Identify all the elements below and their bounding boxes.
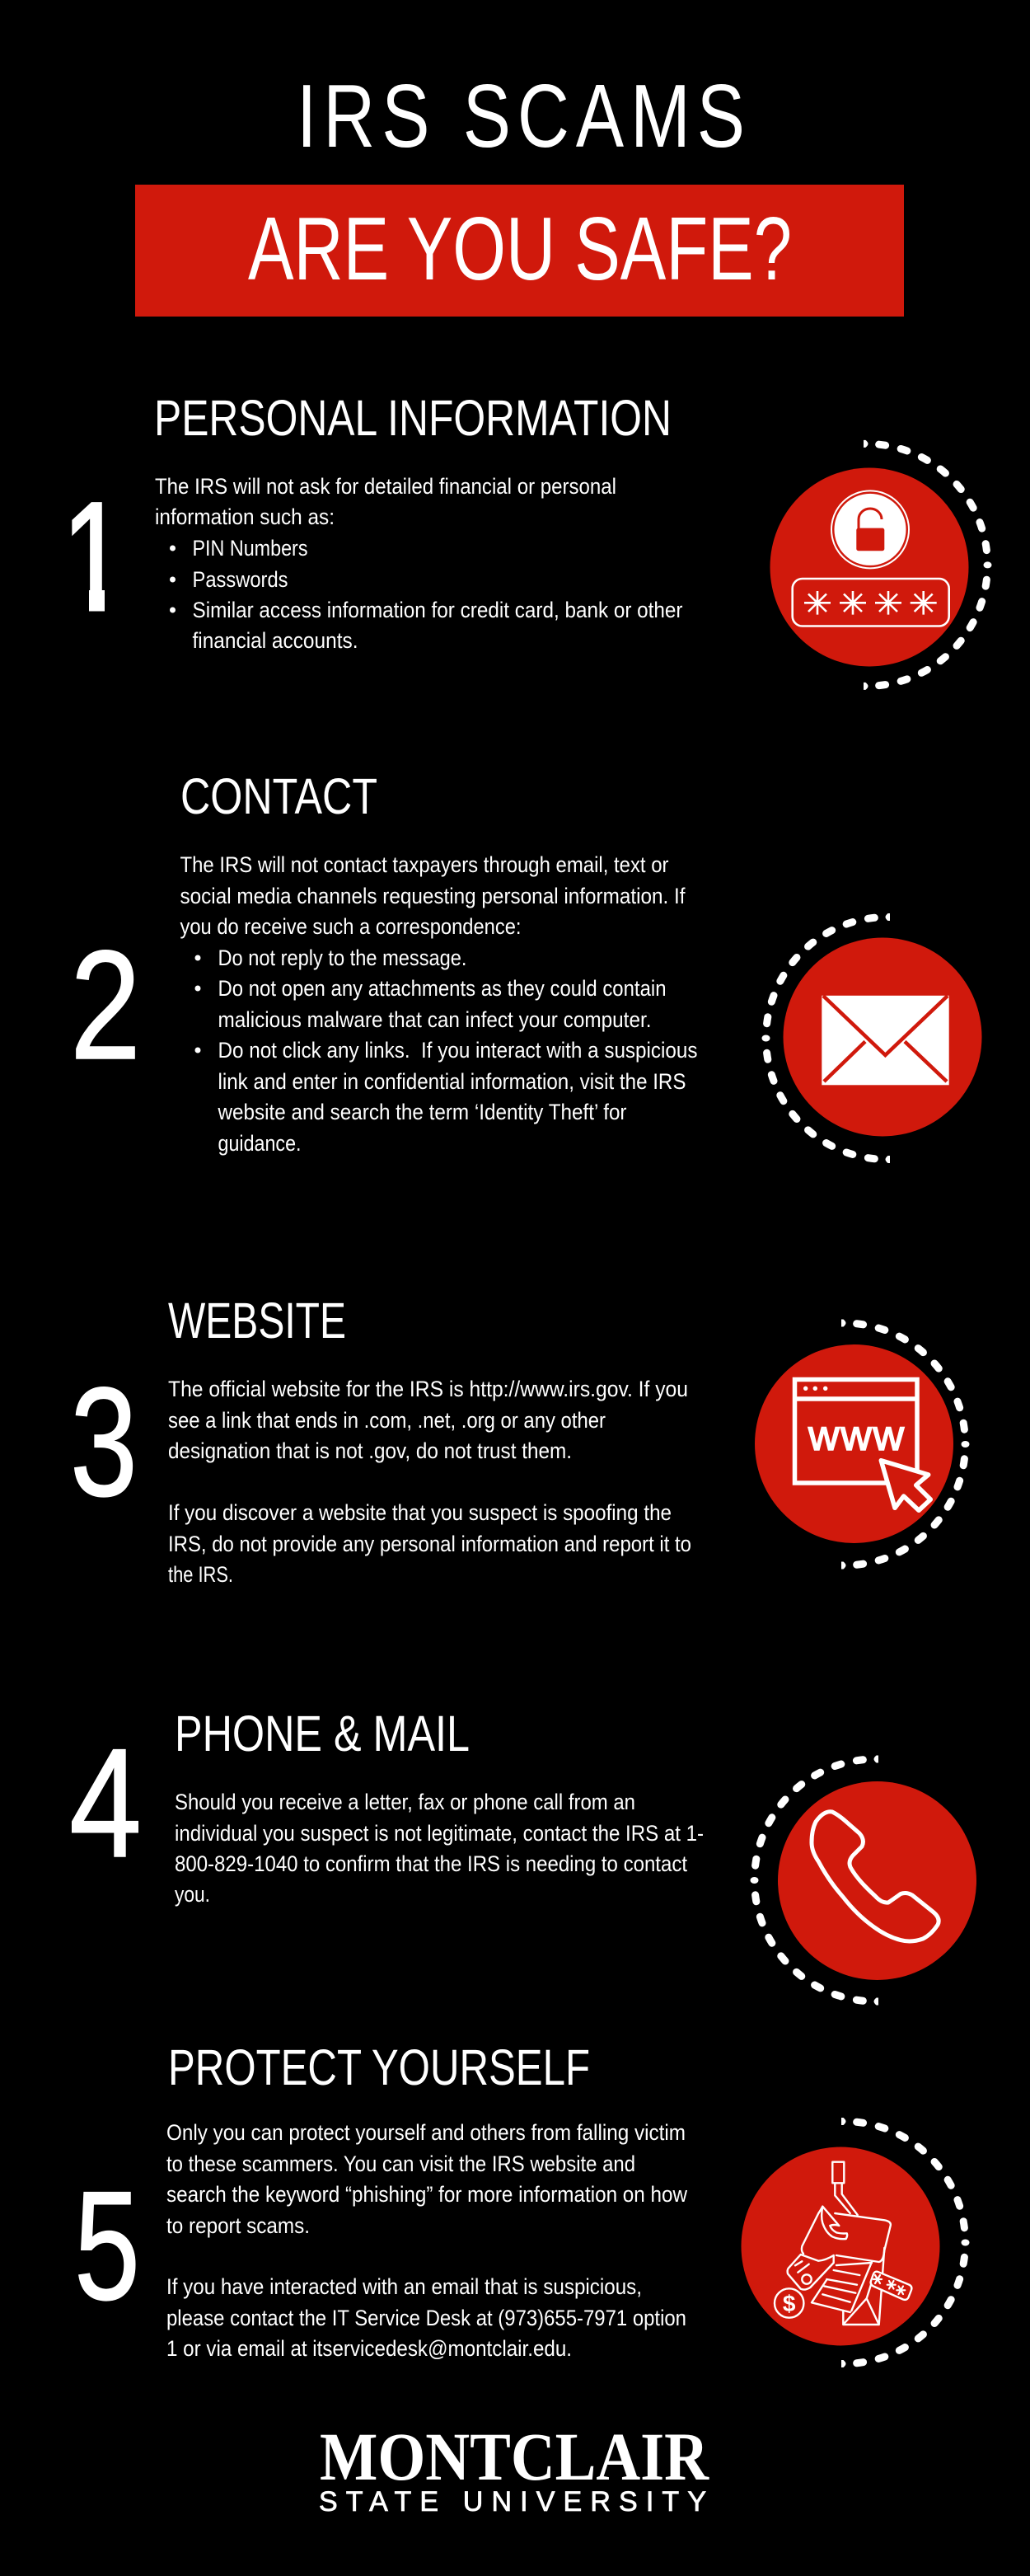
icon: envelope — [761, 913, 982, 1163]
text block: contact: Do not open any attachments as they could contain — [218, 976, 666, 1001]
text block: personal information: Passwords — [193, 567, 288, 592]
text block: protect yourself: Only you can protect yourself and others from falling victim — [166, 2120, 686, 2145]
heading: contact: CONTACT — [180, 768, 377, 824]
heading: protect yourself: PROTECT YOURSELF — [168, 2039, 590, 2095]
text block: website: The official website for the IRS is http://www.irs.gov. If you — [168, 1377, 688, 1401]
text block: contact: social media channels requesting personal information. If — [180, 884, 686, 908]
text block: website: IRS, do not provide any personal information and report it to — [168, 1532, 691, 1556]
number 2: 2 — [70, 918, 141, 1091]
text block: website: see a link that ends in .com, .net, .org or any other — [168, 1408, 606, 1433]
text block: website: designation that is not .gov, do not trust them. — [168, 1438, 572, 1463]
banner: are you safe — [135, 185, 904, 317]
panel: personal information — [59, 390, 992, 690]
icon: dollar sign: $ — [783, 2291, 796, 2316]
number 3: 3 — [70, 1355, 138, 1528]
text block: protect yourself: please contact the IT Service Desk at (973)655-7971 option — [166, 2306, 686, 2330]
text block: phone and mail — [175, 1790, 704, 1907]
text block: contact: website and search the term ‘Identity Theft’ for — [218, 1100, 627, 1124]
text block: contact: malicious malware that can infect your computer. — [218, 1007, 651, 1032]
text block: website: If you discover a website that you suspect is spoofing the — [168, 1500, 672, 1525]
logo: montclair state university: STATE UNIVERSITY — [319, 2486, 706, 2517]
text block: contact: Do not reply to the message. — [218, 945, 466, 970]
text block: protect yourself — [166, 2120, 688, 2361]
text block: personal information — [155, 474, 683, 653]
text block: contact: you do receive such a correspondence: — [180, 914, 521, 939]
text block: phone and mail: 800-829-1040 to confirm that the IRS is needing to contact — [175, 1851, 688, 1876]
text block: website — [168, 1377, 691, 1587]
text block: contact: The IRS will not contact taxpayers through email, text or — [180, 852, 669, 877]
number 1: 1 — [62, 470, 126, 643]
number 5: 5 — [74, 2159, 140, 2332]
panel: phone and mail — [69, 1706, 976, 2005]
icon: browser window with cursor: www — [808, 1412, 904, 1460]
logo: montclair state university: MONTCLAIR — [320, 2419, 709, 2494]
text block: personal information: financial accounts. — [193, 628, 358, 653]
text block: personal information: information such as: — [155, 504, 335, 529]
text block: protect yourself: to these scammers. You can visit the IRS website and — [166, 2151, 635, 2176]
text block: personal information: The IRS will not ask for detailed financial or personal — [155, 474, 616, 499]
number 4: 4 — [69, 1716, 142, 1889]
icon: telephone handset — [750, 1756, 976, 2005]
text block: protect yourself: to report scams. — [166, 2213, 310, 2238]
heading: personal information: PERSONAL INFORMATION — [154, 390, 672, 446]
text block: personal information: PIN Numbers — [193, 536, 308, 561]
text block: protect yourself: If you have interacted with an email that is suspicious, — [166, 2274, 642, 2299]
heading: phone and mail: PHONE & MAIL — [175, 1706, 470, 1762]
text block: phone and mail: Should you receive a letter, fax or phone call from an — [175, 1790, 635, 1814]
text block: protect yourself: 1 or via email at itservicedesk@montclair.edu. — [166, 2336, 572, 2361]
text block: phone and mail: individual you suspect is not legitimate, contact the IRS at 1- — [175, 1821, 704, 1846]
icon: padlock and password — [770, 440, 992, 690]
text block: personal information: Similar access information for credit card, bank or other — [193, 598, 683, 622]
banner: are you safe: ARE YOU SAFE? — [248, 199, 792, 299]
text block: protect yourself: search the keyword “phishing” for more information on how — [166, 2182, 688, 2207]
panel: website — [70, 1293, 969, 1587]
text block: contact — [180, 852, 697, 1156]
icon: browser window with cursor — [755, 1319, 969, 1570]
panel: contact — [70, 768, 982, 1163]
icon: phishing hook and mail — [742, 2118, 969, 2367]
text block: phone and mail: you. — [175, 1882, 210, 1907]
text block: contact: Do not click any links. If you interact with a suspicious — [218, 1038, 697, 1063]
text block: contact: guidance. — [218, 1131, 302, 1156]
text block: website: the IRS. — [168, 1562, 233, 1587]
panel: protect yourself — [74, 2039, 969, 2367]
text block: contact: link and enter in confidential information, visit the IRS — [218, 1069, 686, 1094]
title: IRS SCAMS — [297, 66, 751, 167]
heading: website: WEBSITE — [168, 1293, 346, 1349]
